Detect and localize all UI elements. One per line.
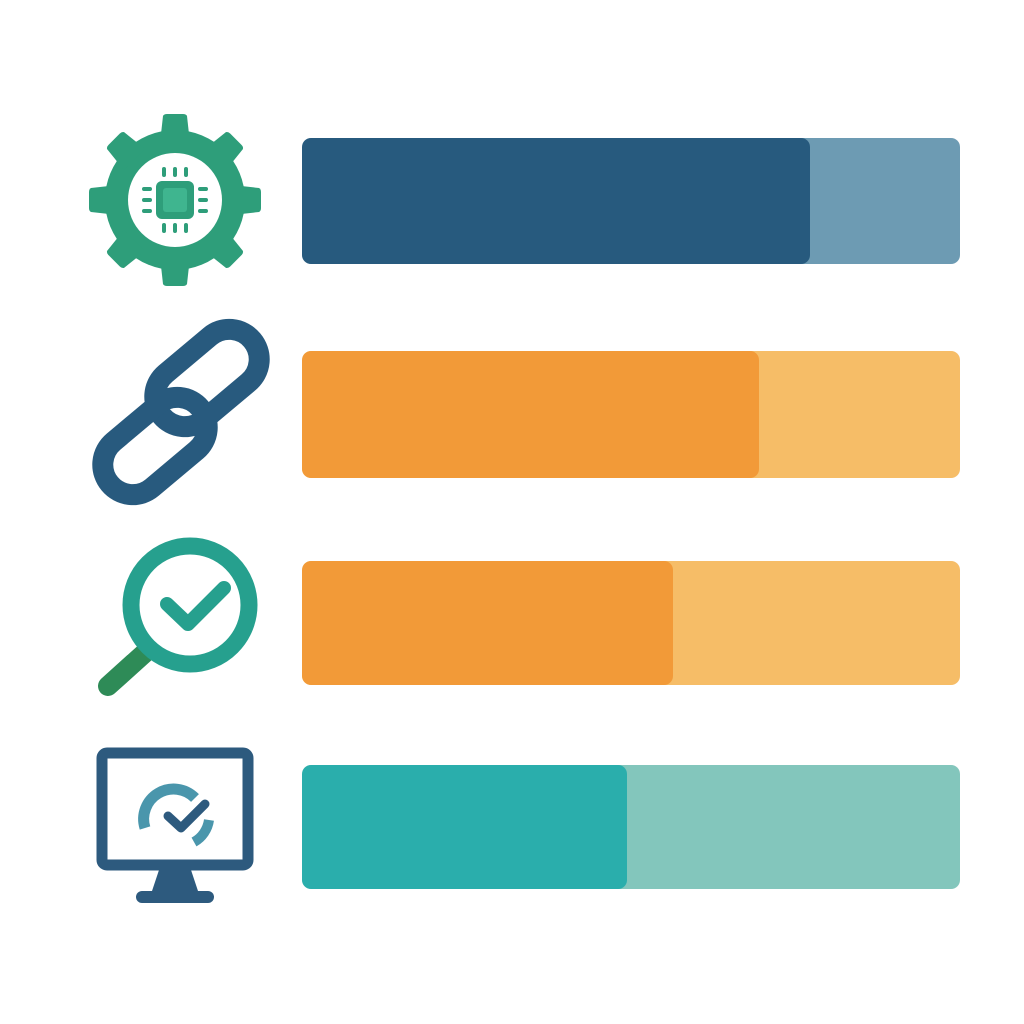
icon: chain link — [91, 317, 271, 507]
icons — [89, 114, 270, 903]
bar 4 — [302, 765, 960, 889]
icon: monitor gauge — [102, 753, 248, 903]
icon: magnifier check — [108, 546, 249, 686]
icon: gear with chip — [89, 114, 261, 286]
bar 3 — [302, 561, 960, 685]
bar 1 — [302, 138, 960, 264]
bar 2 — [302, 351, 960, 478]
